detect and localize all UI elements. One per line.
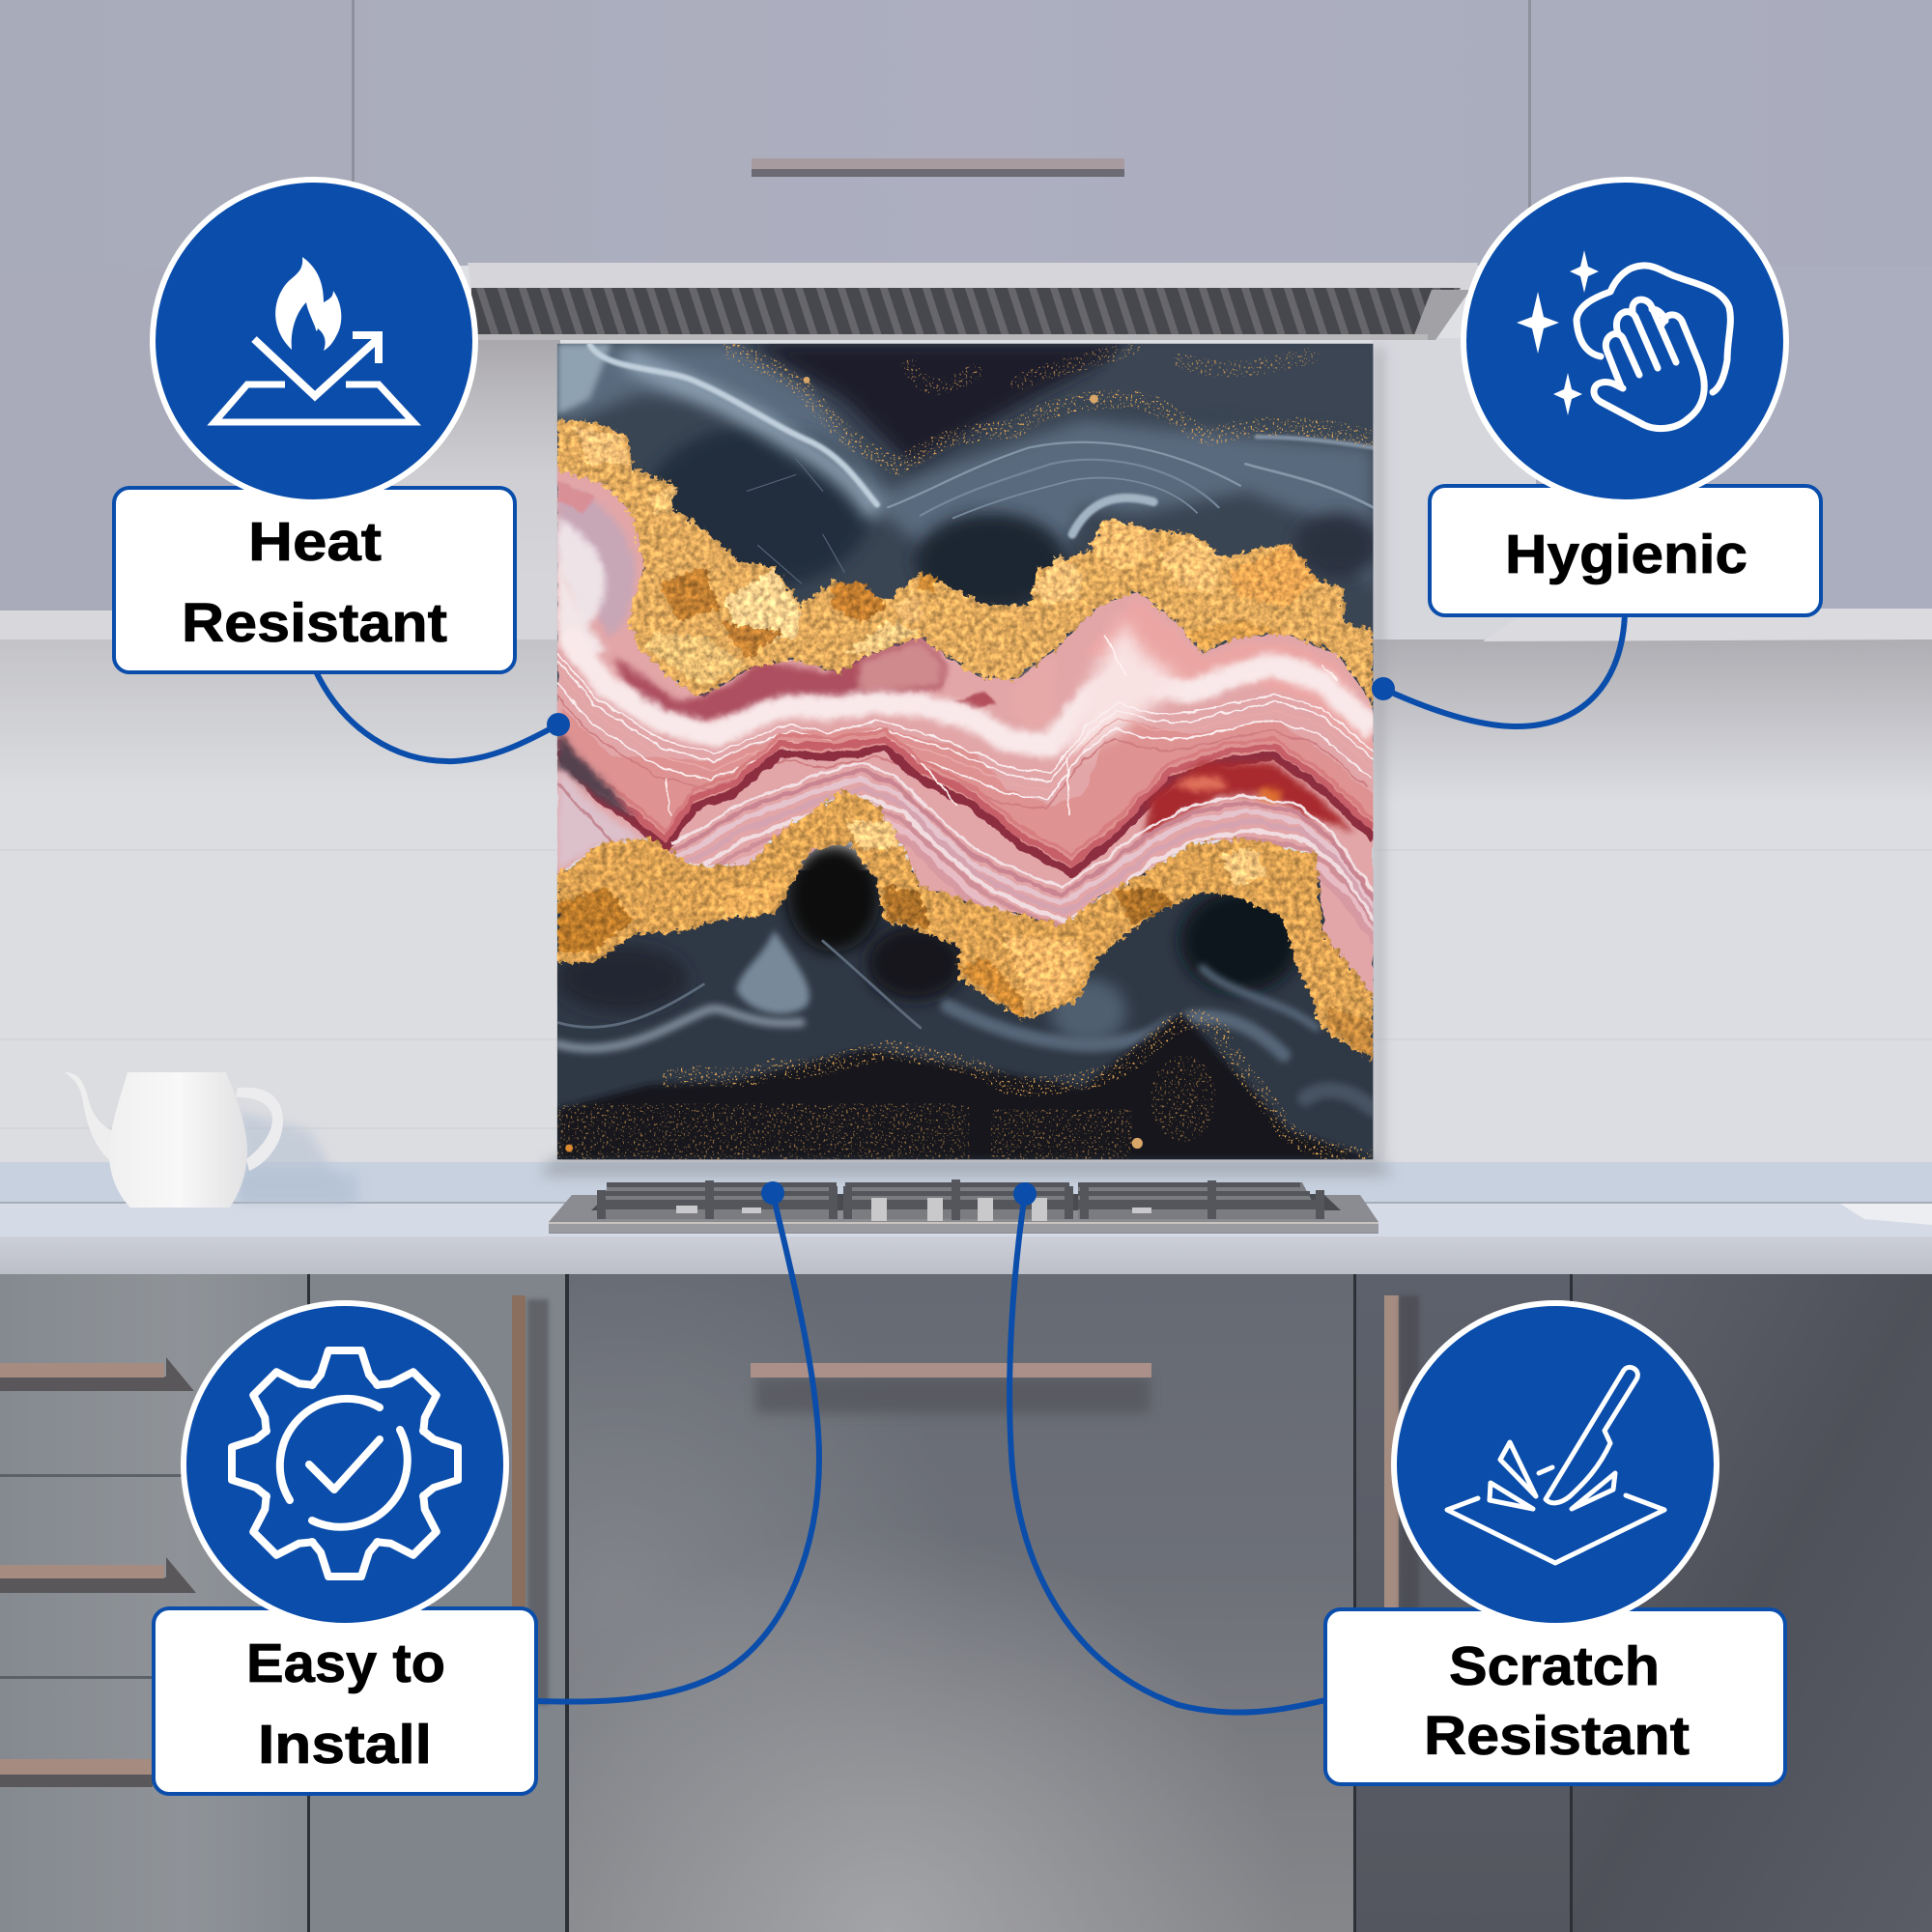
lower gold seam — [557, 789, 1373, 1061]
callout: Hygienic — [1372, 180, 1821, 726]
callout: Heat Resistant — [114, 180, 570, 761]
icon: knife scratching surface — [1447, 1367, 1664, 1563]
cabinet handles — [0, 1295, 1419, 1787]
gold nuggets — [725, 570, 801, 648]
splashback panel: marble agate with gold — [552, 344, 1386, 1159]
gold dust — [557, 348, 1371, 1159]
icon: wiping hand with sparkles — [1517, 250, 1730, 429]
label text: Heat — [248, 511, 382, 573]
cabinet handle — [752, 158, 1124, 177]
connector line to splashback — [315, 669, 570, 761]
white striations upper — [552, 654, 1373, 809]
bright white band — [565, 632, 1373, 746]
label box — [1325, 1609, 1785, 1784]
cabinet undersides — [0, 611, 391, 639]
gold lower nuggets — [1002, 936, 1089, 1007]
pink lobes — [557, 486, 636, 635]
dark crimson valley — [557, 749, 1373, 873]
label text: Hygienic — [1505, 524, 1747, 585]
agate pink band — [552, 464, 1386, 1001]
label text: Easy to — [246, 1633, 445, 1694]
label box — [114, 488, 515, 672]
lilac layered stripes — [671, 762, 1386, 958]
worktop — [0, 1162, 1932, 1274]
callout: Scratch Resistant — [1009, 1182, 1785, 1784]
connector line to splashback — [1372, 612, 1625, 726]
agate lower dark region — [557, 843, 1373, 1159]
icon: flame on surface — [214, 257, 413, 422]
rose sheet — [557, 708, 1373, 873]
label box — [154, 1608, 536, 1794]
label text: Scratch — [1449, 1635, 1660, 1697]
icon disc — [184, 1303, 506, 1626]
agate upper slate region — [557, 344, 1381, 755]
label text: Resistant — [182, 592, 447, 654]
icon: gear with check mark — [232, 1350, 458, 1577]
callout: Easy to Install — [154, 1181, 819, 1794]
cooker hood — [468, 263, 1478, 340]
label text: Install — [258, 1714, 432, 1776]
icon disc — [1394, 1303, 1717, 1626]
pale pink right pool — [1083, 597, 1373, 756]
tile lines — [0, 850, 1932, 1128]
upper cabinets — [0, 0, 1932, 612]
upper gold seam — [557, 420, 1373, 708]
lower cabinets — [0, 1274, 1932, 1932]
dark wedge at left — [557, 732, 636, 819]
label text: Resistant — [1424, 1705, 1690, 1767]
splashback shadow — [551, 348, 1384, 1173]
icon disc — [153, 180, 475, 502]
crimson upper pool — [614, 638, 947, 721]
label box — [1430, 486, 1821, 615]
wall left of splashback — [391, 338, 560, 641]
teapot — [65, 1072, 353, 1208]
connector line to cooktop — [538, 1181, 819, 1702]
lilac fan at left — [557, 768, 644, 870]
cooktop — [549, 1179, 1378, 1234]
icon disc — [1463, 180, 1786, 502]
connector line to cooktop — [1009, 1182, 1325, 1713]
wall right of splashback — [1372, 338, 1536, 647]
